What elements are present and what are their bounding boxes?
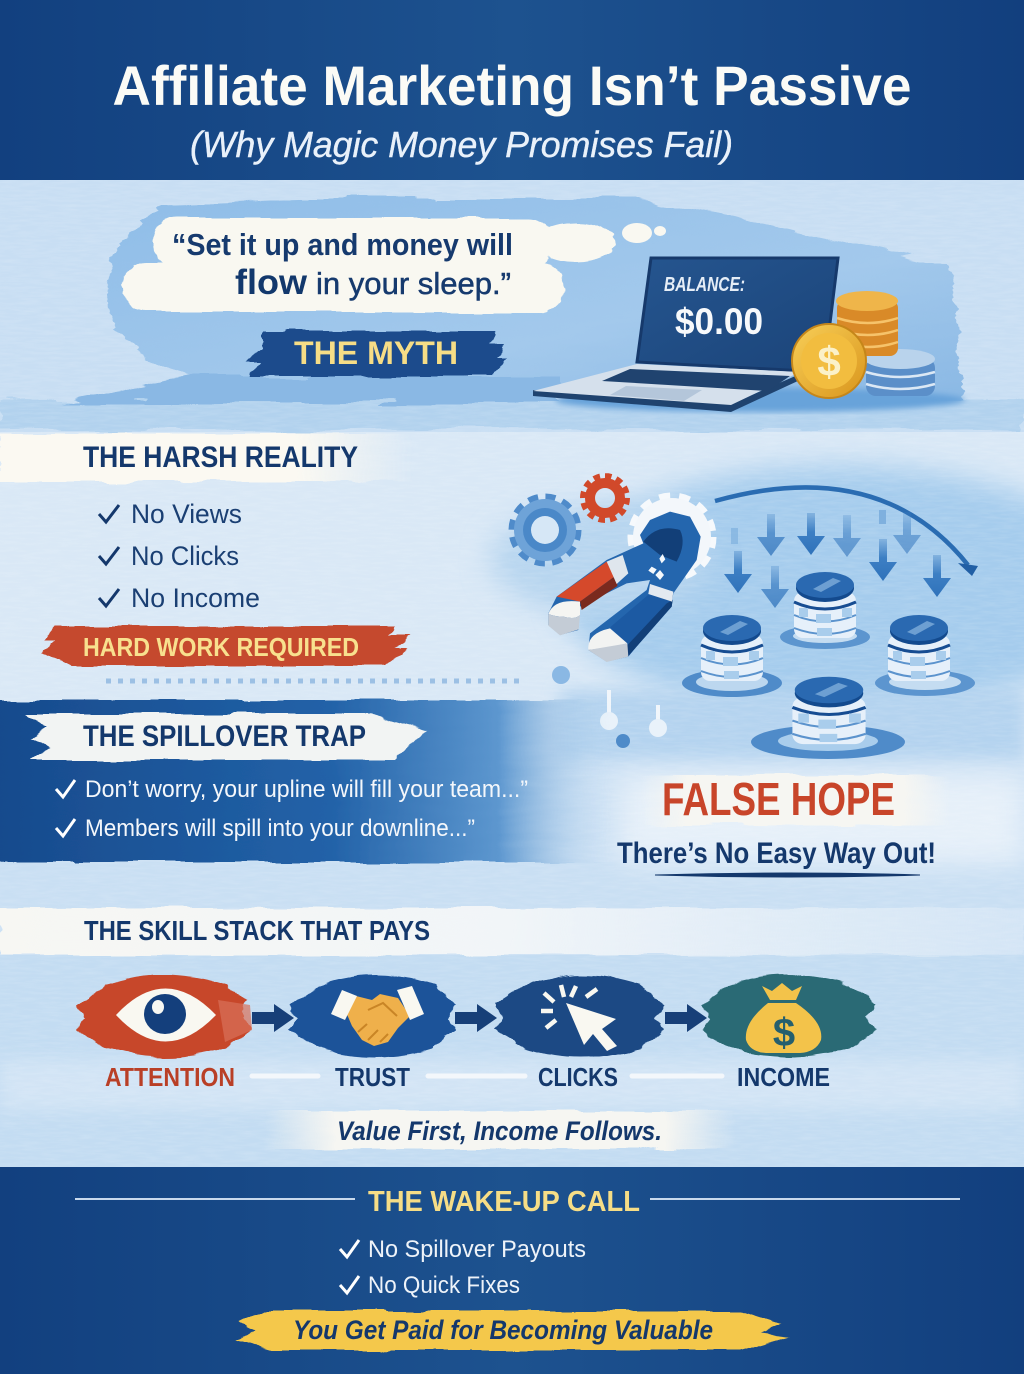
step: attention: ATTENTION — [105, 1062, 235, 1092]
step: trust — [290, 975, 455, 1092]
reality heading strip — [0, 434, 412, 482]
dotted divider — [106, 678, 520, 684]
step: income — [701, 975, 878, 1092]
checklist: spillover — [56, 776, 528, 842]
icon: blue gear — [512, 497, 578, 563]
panel: the spillover trap — [0, 700, 610, 862]
spillover heading strip — [25, 714, 425, 760]
step: income: INCOME — [737, 1062, 830, 1092]
checklist: reality: No Clicks — [131, 541, 239, 571]
checklist: wake-up — [340, 1236, 586, 1299]
heading rules — [75, 1198, 960, 1200]
skill stack heading strip — [0, 908, 1024, 955]
tagline: Value First, Income Follows. — [337, 1116, 662, 1146]
icon: laptop: BALANCE: — [664, 274, 745, 296]
checklist: wake-up: No Quick Fixes — [368, 1272, 520, 1299]
panel: the skill stack that pays: THE SKILL STACK THAT PAYS — [84, 915, 430, 946]
myth quote: “Set it up and money will — [172, 227, 513, 262]
yellow banner — [236, 1311, 790, 1350]
icon: coin stacks: $ — [817, 338, 841, 385]
icon: white gear — [631, 496, 713, 578]
checklist: reality: No Income — [131, 583, 260, 613]
step: income: $ — [773, 1011, 795, 1055]
spillover band — [0, 700, 610, 862]
checklist: spillover: Don’t worry, your upline will fill your team...” — [85, 776, 528, 803]
header band — [0, 0, 1024, 180]
step: trust: TRUST — [335, 1062, 410, 1092]
subtitle: (Why Magic Money Promises Fail) — [190, 124, 733, 165]
panel: the harsh reality: HARD WORK REQUIRED — [83, 632, 359, 662]
curved arrow — [715, 487, 978, 576]
panel: the myth: in your sleep.” — [316, 266, 511, 301]
panel: the wake-up call: You Get Paid for Becoming Valuable — [293, 1315, 713, 1345]
panel: the myth: THE MYTH — [294, 335, 458, 371]
icon: coin stacks — [792, 291, 935, 398]
checklist: reality: No Views — [131, 499, 242, 529]
thought bubbles — [622, 223, 666, 243]
falling arrows — [724, 510, 951, 608]
panel: the harsh reality: THE HARSH REALITY — [83, 441, 358, 474]
callout: false hope: There’s No Easy Way Out! — [617, 837, 936, 870]
icon: red gear — [583, 476, 627, 520]
connector lines — [252, 1074, 722, 1078]
hard work banner — [42, 626, 412, 666]
callout: false hope: FALSE HOPE — [662, 773, 895, 825]
arrow — [665, 1004, 707, 1032]
checklist: reality — [99, 499, 260, 613]
checklist: wake-up: No Spillover Payouts — [368, 1236, 586, 1263]
checklist: spillover: Members will spill into your downline...” — [85, 815, 475, 842]
myth label — [245, 331, 508, 376]
arrow — [252, 1004, 294, 1032]
wake-up heading: THE WAKE-UP CALL — [368, 1186, 640, 1218]
step: clicks: CLICKS — [538, 1062, 618, 1092]
icon: magnet — [548, 512, 701, 662]
speech cloud — [122, 218, 615, 312]
panel: the skill stack that pays — [0, 908, 1024, 1149]
tagline — [265, 1111, 735, 1149]
panel: the myth: flow — [235, 263, 308, 302]
illustration: magnet, gears and coin stacks — [512, 476, 978, 759]
coin stack B — [780, 572, 870, 649]
panel: the harsh reality — [0, 434, 520, 681]
section background washes — [0, 180, 1024, 1167]
panel: the spillover trap: THE SPILLOVER TRAP — [83, 720, 366, 753]
step: attention — [77, 975, 252, 1092]
arrow — [455, 1004, 497, 1032]
icon: laptop — [533, 258, 838, 412]
coin stack C — [875, 615, 975, 696]
step: clicks — [494, 975, 665, 1092]
myth blue backdrop — [108, 198, 965, 402]
title: Affiliate Marketing Isn’t Passive — [112, 54, 912, 117]
callout: false hope — [617, 773, 950, 877]
coin stack A — [682, 615, 782, 697]
panel: the myth — [60, 198, 965, 412]
icon: laptop: $0.00 — [675, 301, 763, 342]
coin stack D — [751, 677, 905, 759]
decorative circuit dots — [552, 666, 667, 748]
laptop shadow — [555, 388, 965, 412]
panel: the wake-up call — [0, 1167, 1024, 1374]
